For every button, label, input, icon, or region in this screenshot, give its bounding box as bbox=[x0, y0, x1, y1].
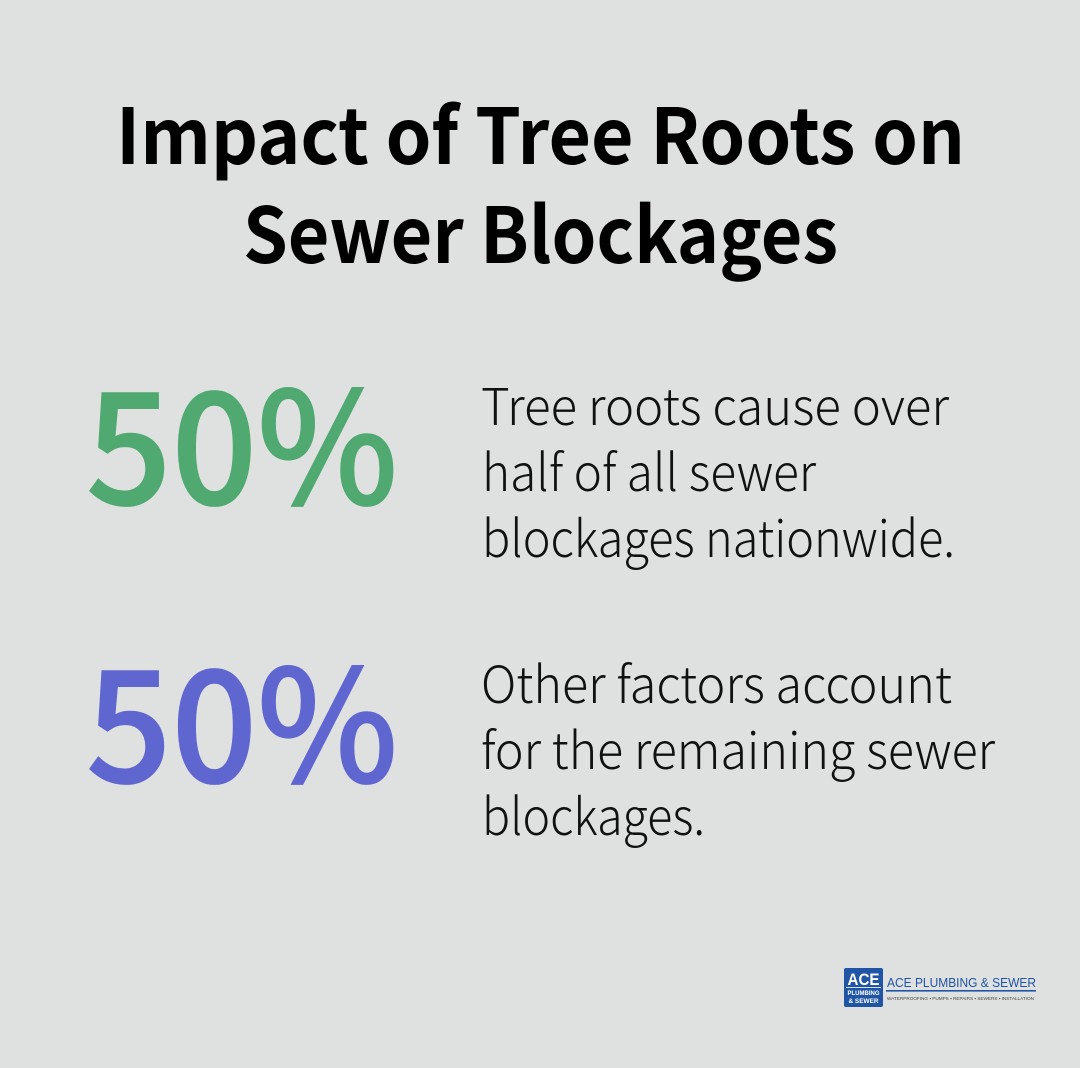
stat description: tree roots: blockages nationwide. bbox=[482, 498, 955, 572]
stat number: blue 50%: 50% bbox=[86, 602, 398, 827]
logo badge: PLUMBING bbox=[848, 990, 880, 997]
logo badge bbox=[844, 968, 883, 1007]
stat description: other factors bbox=[481, 644, 996, 850]
logo badge: ACE bbox=[848, 971, 880, 989]
stat: 50% tree roots bbox=[86, 324, 955, 572]
logo wordmark: ACE PLUMBING & SEWER bbox=[887, 976, 1036, 990]
stat description: tree roots: Tree roots cause over bbox=[481, 366, 950, 440]
title: Sewer Blockages bbox=[243, 175, 838, 286]
stat description: other factors: for the remaining sewer bbox=[481, 710, 996, 784]
stat description: other factors: Other factors account bbox=[481, 644, 952, 718]
stat description: other factors: blockages. bbox=[482, 776, 705, 850]
logo badge: & SEWER bbox=[848, 998, 879, 1005]
logo: ACE Plumbing & Sewer bbox=[844, 968, 1036, 1007]
stat description: tree roots: half of all sewer bbox=[482, 432, 817, 506]
logo tagline: WATERPROOFING ▪ PUMPS ▪ REPAIRS ▪ SEWERS ▪ INSTALLATION bbox=[887, 996, 1034, 1001]
title: Impact of Tree Roots on bbox=[116, 76, 965, 187]
stat description: tree roots bbox=[481, 366, 955, 572]
stat number: green 50%: 50% bbox=[86, 324, 398, 549]
stat: 50% other factors bbox=[86, 602, 996, 850]
title bbox=[116, 76, 965, 286]
